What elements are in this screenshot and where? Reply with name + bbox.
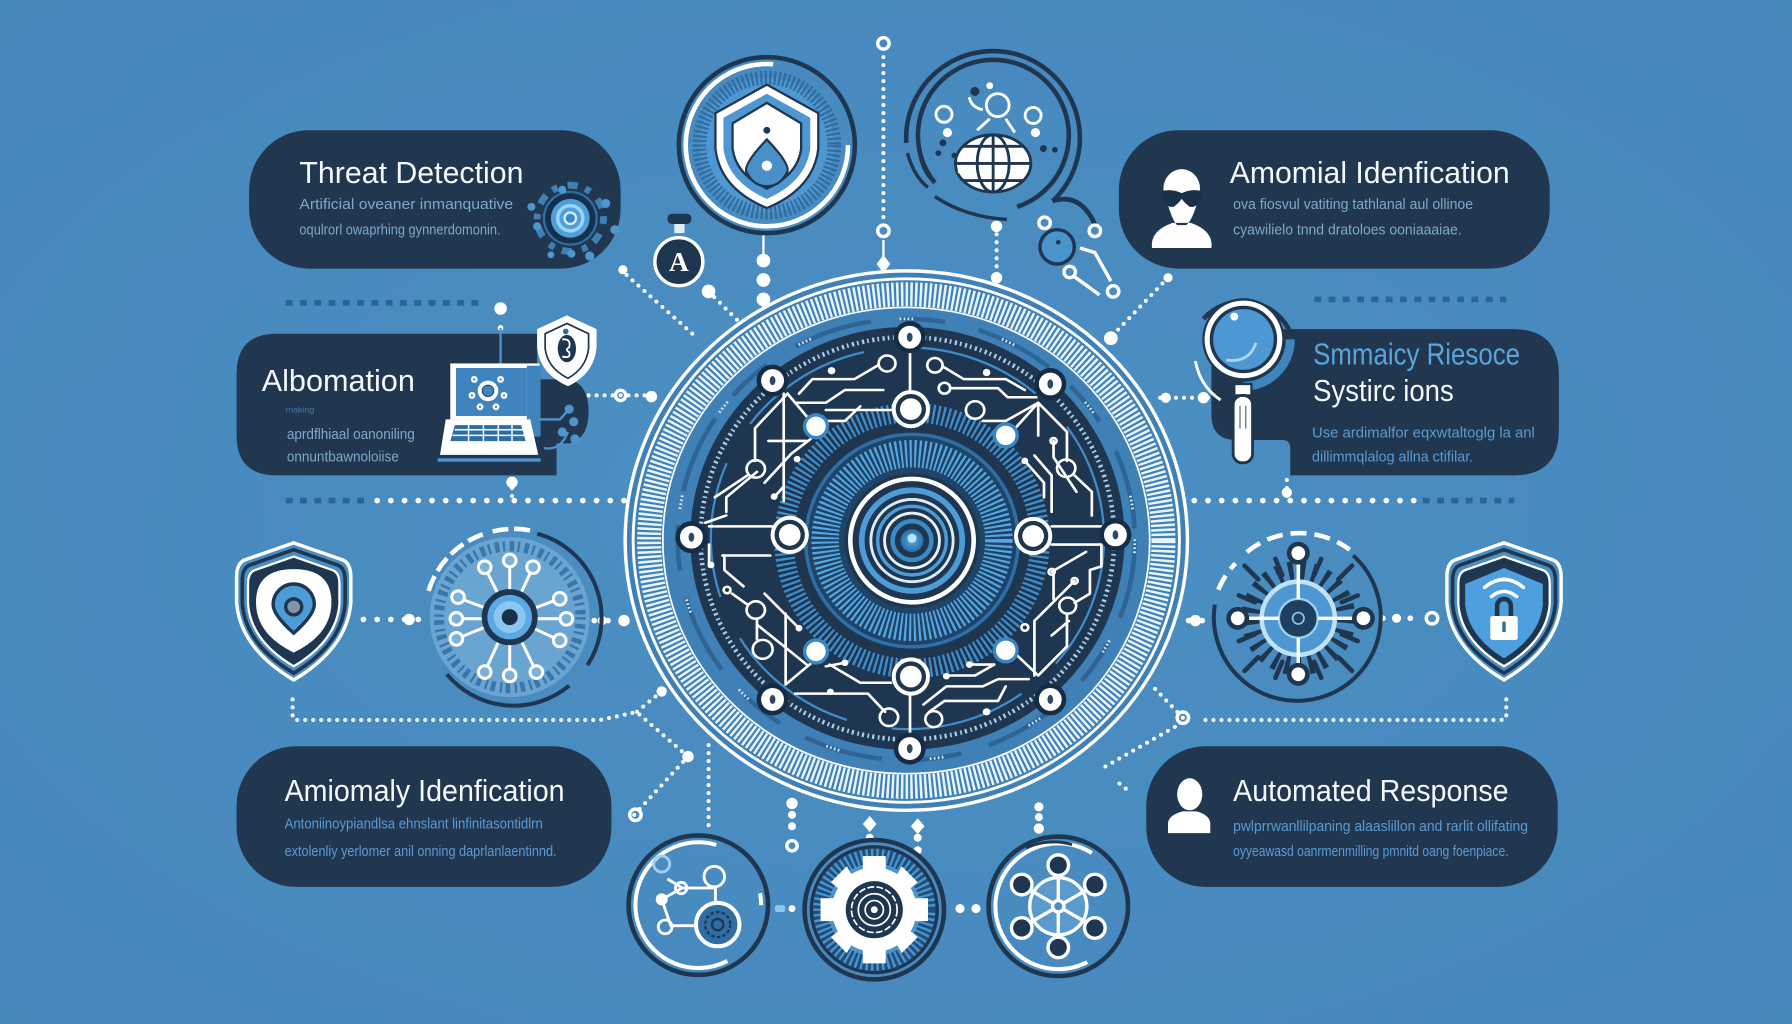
body text: ova fiosvul vatiting tathlanal aul ollinoe bbox=[1233, 197, 1473, 213]
body text: Use ardimalfor eqxwtaltoglg la anl bbox=[1312, 426, 1535, 442]
body text: onnuntbawnoloiise bbox=[287, 450, 399, 466]
heading: Amiomaly Idenfication bbox=[285, 773, 565, 808]
panel: amiomaly identification bbox=[237, 746, 611, 887]
icon: A badge: A bbox=[669, 247, 689, 277]
body text: making bbox=[286, 406, 314, 415]
panel: automated response bbox=[1146, 746, 1558, 887]
icon: network node circle bbox=[429, 529, 602, 706]
central circuit dial bbox=[625, 271, 1187, 810]
icon: network fingerprint badge bbox=[629, 835, 768, 975]
circuit traces bbox=[705, 348, 1101, 737]
panel: amomial identification bbox=[1119, 130, 1550, 269]
panel: albomation bbox=[237, 315, 597, 475]
body text bbox=[286, 406, 415, 466]
icon: molecule badge bbox=[989, 837, 1128, 976]
body text: dillimmqlalog allna ctifilar. bbox=[1312, 450, 1473, 466]
icon: small shield bbox=[537, 315, 597, 386]
core concentric rings bbox=[845, 473, 979, 608]
icon: magnifying glass bbox=[1195, 299, 1291, 463]
icon: person with sunglasses bbox=[1152, 169, 1212, 248]
body text: pwlprrwanllilpaning alaaslillon and rarlit ollifating bbox=[1233, 819, 1528, 835]
icon: A badge bbox=[655, 214, 703, 286]
body text bbox=[1233, 819, 1528, 860]
body text: aprdflhiaal oanoniling bbox=[287, 427, 415, 443]
icon: person bbox=[1168, 778, 1210, 833]
heading blue line: Smmaicy Riesoce bbox=[1313, 337, 1520, 372]
body text bbox=[285, 817, 557, 860]
connector lines and dots bbox=[286, 38, 1514, 913]
dark disc bbox=[690, 327, 1125, 750]
body text: oqulrorl owaprhing gynnerdomonin. bbox=[299, 222, 501, 238]
icon: threat eye bbox=[527, 185, 619, 261]
body text: cyawilielo tnnd dratoloes ooniaaaiae. bbox=[1233, 222, 1462, 238]
outer tick ring bbox=[625, 271, 1187, 810]
heading: Automated Response bbox=[1233, 773, 1509, 808]
icon: gear badge bbox=[805, 840, 944, 979]
icon: globe network badge bbox=[906, 51, 1095, 224]
icon: top shield badge bbox=[679, 57, 855, 233]
heading white line: Systirc ions bbox=[1313, 373, 1454, 408]
icon: laptop bbox=[438, 328, 579, 462]
heading: Threat Detection bbox=[299, 155, 523, 190]
body text: extolenliy yerlomer anil onning daprlanlaentinnd. bbox=[285, 844, 557, 860]
icon: left shield with pin bbox=[237, 543, 351, 680]
body text: Antoniinoypiandlsa ehnslant linfinitasontidlrn bbox=[285, 817, 543, 833]
disc tick rings bbox=[701, 337, 1114, 739]
panel: threat detection bbox=[249, 130, 621, 269]
body text bbox=[1312, 426, 1535, 466]
heading: Amomial Idenfication bbox=[1230, 155, 1510, 190]
medium nodes bbox=[773, 392, 1050, 694]
inner blue tick rings bbox=[784, 413, 1040, 669]
body text bbox=[299, 197, 513, 238]
heading: Albomation bbox=[262, 363, 415, 398]
globe bbox=[955, 135, 1031, 192]
icon: small lens and links bbox=[1039, 217, 1119, 297]
icon: virus circle bbox=[1214, 533, 1381, 701]
icon: right shield with lock bbox=[1447, 543, 1561, 680]
body text: Artificial oveaner inmanquative bbox=[299, 197, 513, 213]
body text bbox=[1233, 197, 1473, 238]
outer nodes bbox=[678, 323, 1129, 762]
body text: oyyeawasd oanrmenmilling pmnitd oang foenpiace. bbox=[1233, 844, 1509, 860]
panel: symmaicy riesoce systirc ions bbox=[1195, 299, 1559, 475]
